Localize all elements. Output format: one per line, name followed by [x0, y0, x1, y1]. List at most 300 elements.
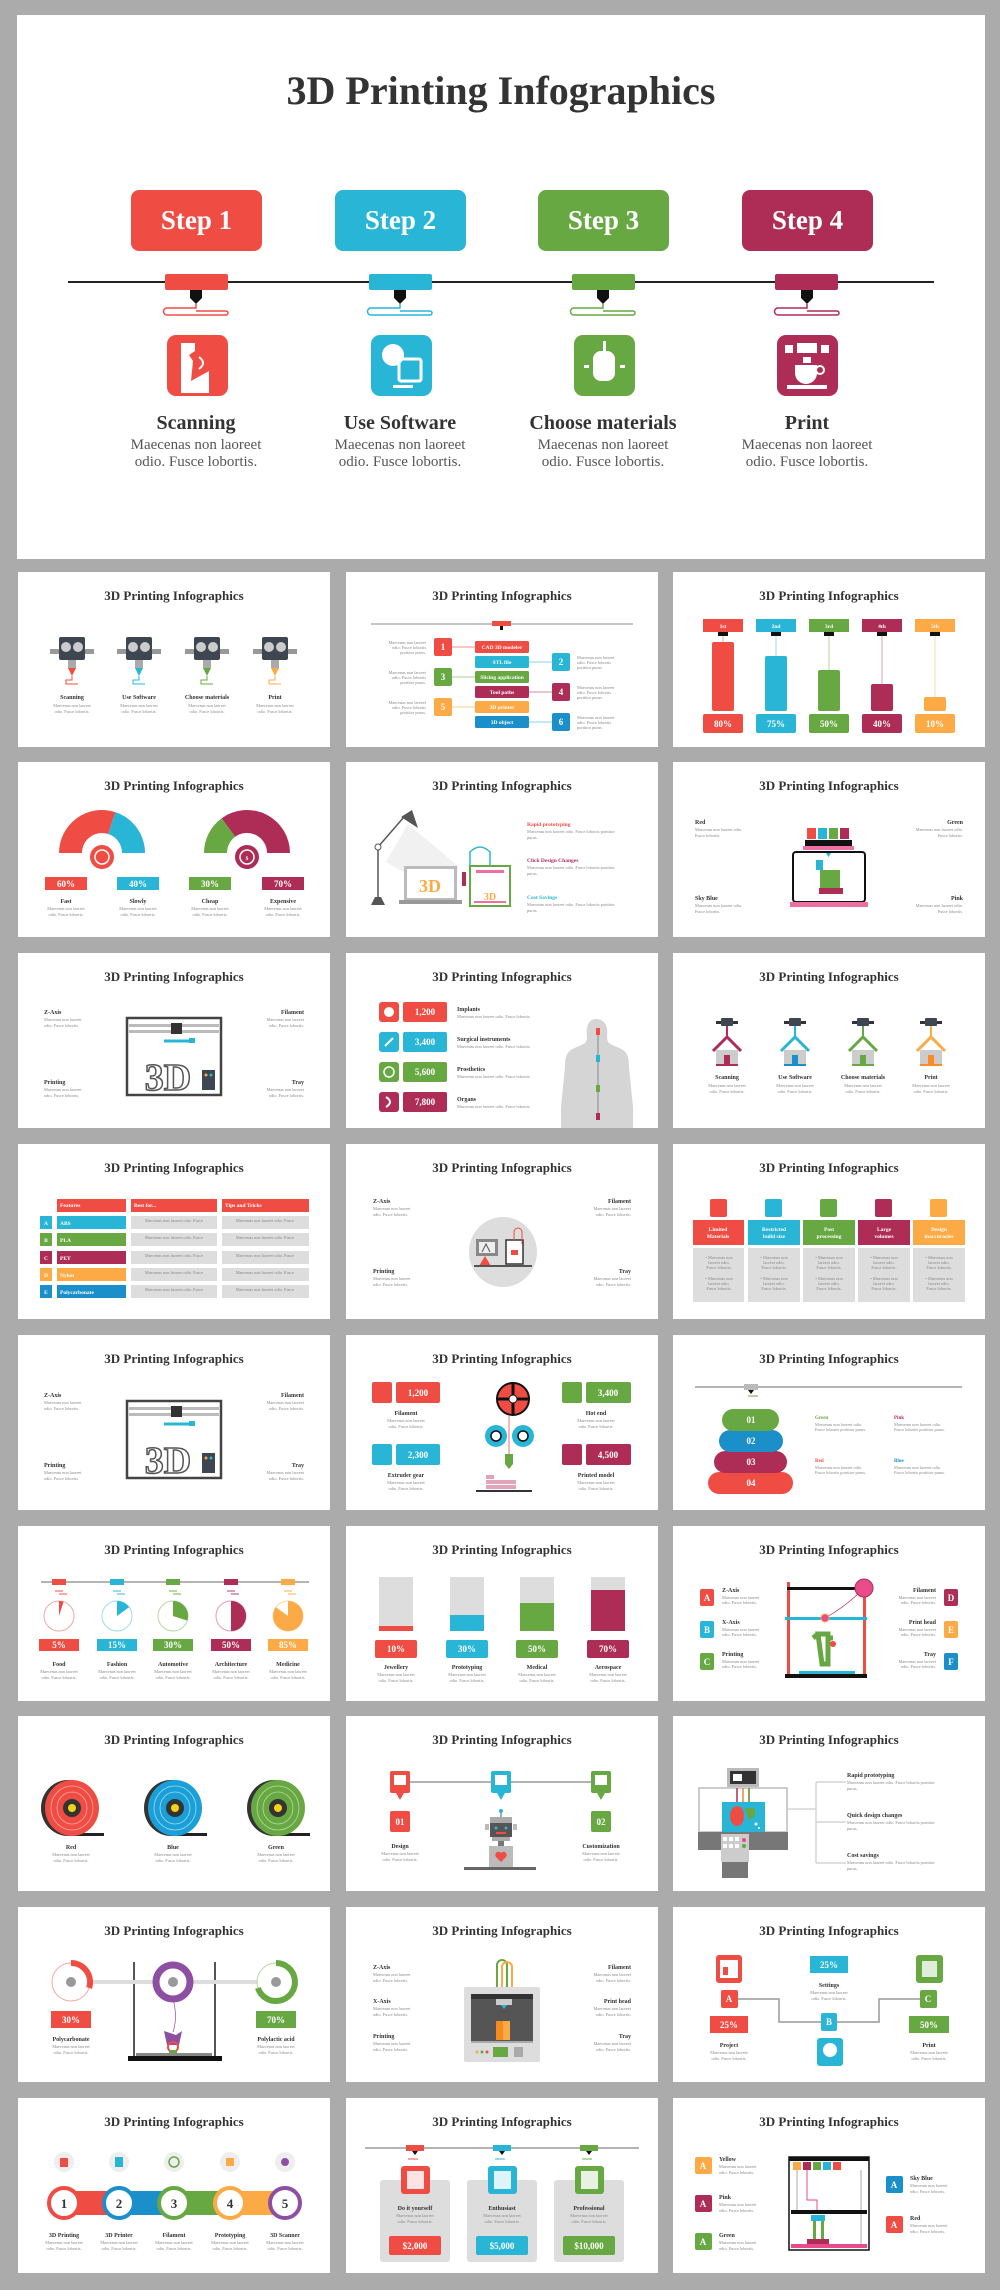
thumb 25: numbered chain: 3D Printer [105, 2233, 133, 2239]
thumb 15: stacked layers: Fusce lobortis porttitor purus. [894, 1427, 945, 1432]
thumb 24: workflow ABC: Project [720, 2043, 738, 2049]
thumb 12: limitations: 3D Printing Infographics [759, 1160, 899, 1175]
thumb 16: pie industries: Medicine [276, 1662, 300, 1668]
thumb 15: stacked layers: 04 [746, 1478, 756, 1488]
thumb 22: donut materials: 30% [62, 2015, 80, 2025]
thumb 10: materials table: B [44, 1238, 48, 1244]
thumb 13: printer axes (repeat): Printing [44, 1463, 65, 1469]
thumb 14: extruder parts: 3D Printing Infographics [432, 1351, 572, 1366]
thumb 13: printer axes (repeat) [18, 1335, 330, 1510]
thumb 9: houses: 3D Printing Infographics [759, 969, 899, 984]
thumb 13: printer axes (repeat): Z-Axis [44, 1393, 62, 1399]
thumb 24: workflow ABC: C [925, 1994, 931, 2004]
thumb 12: limitations: Limited [709, 1227, 727, 1233]
thumb 13: printer axes (repeat): Maecenas non laoreet [267, 1470, 305, 1475]
thumb 21: bioprinter: Maecenas non laoreet odio. Fusce lobortis porttitor [847, 1860, 935, 1865]
thumb 6: color printer: 3D Printing Infographics [759, 778, 899, 793]
thumb 4: gauges: odio. Fusce lobortis. [48, 912, 84, 917]
thumb 20: robot design: Maecenas non laoreet [381, 1851, 420, 1856]
thumb 4: gauges: Maecenas non laoreet [264, 906, 303, 911]
thumb 23: box printer: Printing [373, 2034, 394, 2040]
thumb 11: printer in circle: Filament [608, 1199, 631, 1205]
thumb 18: printer frame with letters: C [704, 1657, 710, 1667]
thumb 10: materials table: Maecenas non laoreet odio. Fusce [236, 1218, 294, 1223]
thumb 9: houses [673, 953, 985, 1128]
thumb 16: pie industries: Food [52, 1662, 66, 1668]
thumb 17: fill bars: 10% [387, 1644, 405, 1654]
thumb 18: printer frame with letters: odio. Fusce lobortis. [901, 1632, 936, 1637]
thumb 21: bioprinter [673, 1716, 985, 1891]
thumb 24: workflow ABC: 3D Printing Infographics [759, 1923, 899, 1938]
thumb 9: houses: Maecenas non laoreet [912, 1083, 951, 1088]
thumb 16: pie industries: odio. Fusce lobortis. [41, 1675, 77, 1680]
thumb 12: limitations: Fusce lobortis. [871, 1265, 897, 1270]
thumb 27: colour printer frame: Maecenas non laoreet [910, 2183, 948, 2188]
thumb 25: numbered chain: Filament [162, 2233, 186, 2239]
thumb 11: printer in circle: Maecenas non laoreet [373, 1206, 411, 1211]
step 3 label [538, 190, 669, 251]
thumb 16: pie industries: odio. Fusce lobortis. [270, 1675, 306, 1680]
thumb 26: pricing: $10,000 [574, 2241, 604, 2251]
thumb 16: pie industries: Architecture [215, 1662, 248, 1668]
thumb 4: gauges: 40% [129, 879, 147, 889]
thumb 13: printer axes (repeat): Tray [292, 1463, 304, 1469]
thumb 11: printer in circle [346, 1144, 658, 1319]
step 2 text: Maecenas non laoreet [335, 437, 465, 453]
thumb 7: printer axes: Z-Axis [44, 1010, 62, 1016]
thumb 3: ranking bars: 4th [878, 624, 886, 630]
thumb 9: houses: Maecenas non laoreet [844, 1083, 883, 1088]
thumb 5: lamp, laptop and printer: Click Design Changes [527, 858, 578, 864]
thumb 23: box printer: Tray [619, 2034, 631, 2040]
thumb 2: process flow: porttitor purus. [400, 680, 426, 685]
thumb 22: donut materials: Maecenas non laoreet [52, 2044, 91, 2049]
thumb 8: medical numbers: 5,600 [415, 1067, 436, 1077]
thumb 5: lamp, laptop and printer: purus. [527, 908, 538, 913]
thumb 5: lamp, laptop and printer: Maecenas non laoreet odio. Fusce lobortis porttitor [527, 829, 615, 834]
thumb 3: ranking bars: 5th [931, 624, 939, 630]
thumb 22: donut materials: Polylactic acid [257, 2037, 295, 2043]
thumb 27: colour printer frame: Green [719, 2233, 736, 2239]
thumb 26: pricing: odio. Fusce lobortis. [571, 2219, 607, 2224]
thumb 25: numbered chain: Maecenas non laoreet [45, 2240, 84, 2245]
thumb 1: print heads: odio. Fusce lobortis. [54, 709, 90, 714]
thumb 18: printer frame with letters: odio. Fusce lobortis. [722, 1600, 757, 1605]
thumb 10: materials table [18, 1144, 330, 1319]
thumb 12: limitations: • Maecenas non [705, 1276, 733, 1281]
thumb 25: numbered chain: odio. Fusce lobortis. [101, 2246, 137, 2251]
thumb 8: medical numbers: Surgical instruments [457, 1037, 511, 1043]
thumb 4: gauges: Maecenas non laoreet [119, 906, 158, 911]
thumb 2: process flow: Maecenas non laoreet [389, 640, 427, 645]
thumb 19: filament spools: Maecenas non laoreet [154, 1852, 193, 1857]
thumb 9: houses: odio. Fusce lobortis. [709, 1089, 745, 1094]
thumb 16: pie industries: 15% [108, 1640, 126, 1650]
thumb 24: workflow ABC: 25% [820, 1960, 838, 1970]
thumb 13: printer axes (repeat): odio. Fusce lobortis. [44, 1476, 79, 1481]
thumb 22: donut materials: Maecenas non laoreet [257, 2044, 296, 2049]
thumb 14: extruder parts: Maecenas non laoreet [387, 1418, 426, 1423]
thumb 18: printer frame with letters: Print head [909, 1620, 937, 1626]
thumb 10: materials table: Nylon [60, 1273, 74, 1279]
thumb 8: medical numbers: Maecenas non laoreet odio. Fusce lobortis. [457, 1074, 531, 1079]
thumb 21: bioprinter: purus. [847, 1866, 858, 1871]
thumb 6: color printer: Maecenas non laoreet odio. [695, 827, 742, 832]
thumb 25: numbered chain: odio. Fusce lobortis. [46, 2246, 82, 2251]
thumb 12: limitations: laoreet odio. [763, 1281, 785, 1286]
thumb 13: printer axes (repeat): odio. Fusce lobortis. [44, 1406, 79, 1411]
thumb 20: robot design: Maecenas non laoreet [582, 1851, 621, 1856]
thumb 20: robot design [346, 1716, 658, 1891]
thumb 25: numbered chain: 3D Printing Infographics [104, 2114, 244, 2129]
thumb 27: colour printer frame: Pink [719, 2195, 732, 2201]
thumb 12: limitations: • Maecenas non [815, 1255, 843, 1260]
thumb 2: process flow: 3D printer [490, 705, 515, 711]
thumb 12: limitations: Fusce lobortis. [761, 1265, 787, 1270]
thumb 2: process flow: odio. Fusce lobortis [577, 690, 611, 695]
thumb 1: print heads: Choose materials [185, 695, 230, 701]
thumb 27: colour printer frame: Maecenas non laoreet [719, 2164, 757, 2169]
thumb 12: limitations: • Maecenas non [815, 1276, 843, 1281]
thumb 12: limitations: Design [931, 1227, 947, 1233]
thumb 24: workflow ABC: Settings [819, 1983, 840, 1989]
printer rail with print heads [68, 274, 934, 316]
thumb 7: printer axes: Maecenas non laoreet [267, 1087, 305, 1092]
thumb 4: gauges: 3D Printing Infographics [104, 778, 244, 793]
thumb 24: workflow ABC: Maecenas non laoreet [710, 2050, 749, 2055]
thumb 23: box printer: X-Axis [373, 1999, 391, 2005]
thumb 10: materials table: Best for... [134, 1203, 157, 1209]
thumb 18: printer frame with letters: odio. Fusce lobortis. [901, 1600, 936, 1605]
thumb 19: filament spools: Green [268, 1845, 285, 1851]
thumb 9: houses: Choose materials [841, 1075, 886, 1081]
thumb 14: extruder parts [346, 1335, 658, 1510]
thumb 4: gauges: $ [246, 855, 249, 862]
thumb 25: numbered chain: Maecenas non laoreet [266, 2240, 305, 2245]
thumb 25: numbered chain: odio. Fusce lobortis. [212, 2246, 248, 2251]
step 1 heading: Scanning [157, 412, 235, 434]
thumb 2: process flow: Slicing application [480, 675, 524, 681]
thumb 27: colour printer frame: A [891, 2180, 898, 2190]
thumb 16: pie industries: Maecenas non laoreet [40, 1669, 79, 1674]
thumb 16: pie industries: Maecenas non laoreet [154, 1669, 193, 1674]
thumb 13: printer axes (repeat): odio. Fusce lobortis. [269, 1406, 304, 1411]
thumb 22: donut materials: 70% [267, 2015, 285, 2025]
thumb 7: printer axes: Maecenas non laoreet [267, 1017, 305, 1022]
main title: 3D Printing Infographics [287, 68, 715, 113]
thumb 11: printer in circle: Z-Axis [373, 1199, 391, 1205]
thumb 15: stacked layers: 3D Printing Infographics [759, 1351, 899, 1366]
thumb 5: lamp, laptop and printer: purus. [527, 835, 538, 840]
thumb 23: box printer: Maecenas non laoreet [373, 1972, 411, 1977]
thumb 24: workflow ABC: 50% [920, 2020, 938, 2030]
thumb 5: lamp, laptop and printer: Maecenas non laoreet odio. Fusce lobortis porttitor [527, 902, 615, 907]
thumb 23: box printer: odio. Fusce lobortis. [373, 2047, 408, 2052]
thumb 18: printer frame with letters: odio. Fusce lobortis. [722, 1664, 757, 1669]
thumb 14: extruder parts: Extruder gear [388, 1473, 425, 1479]
thumb 5: lamp, laptop and printer: 3D Printing Infographics [432, 778, 572, 793]
thumb 22: donut materials: Polycarbonate [52, 2037, 90, 2043]
thumb 1: print heads: odio. Fusce lobortis. [189, 709, 225, 714]
thumb 10: materials table: Maecenas non laoreet odio. Fusce [236, 1253, 294, 1258]
thumb 23: box printer: Maecenas non laoreet [594, 2006, 632, 2011]
thumb 21: bioprinter: Quick design changes [847, 1813, 903, 1819]
thumb 14: extruder parts: odio. Fusce lobortis. [578, 1424, 614, 1429]
thumb 12: limitations: processing [817, 1234, 842, 1240]
thumb 2: process flow: odio. Fusce lobortis [577, 720, 611, 725]
thumb 14: extruder parts: odio. Fusce lobortis. [388, 1424, 424, 1429]
thumb 4: gauges: odio. Fusce lobortis. [192, 912, 228, 917]
step 4 text [742, 437, 872, 470]
thumb 6: color printer: Maecenas non laoreet odio. [916, 827, 963, 832]
thumb 22: donut materials: odio. Fusce lobortis. [258, 2050, 294, 2055]
thumb 16: pie industries: odio. Fusce lobortis. [213, 1675, 249, 1680]
thumb 11: printer in circle: Tray [619, 1269, 631, 1275]
thumb 21: bioprinter: 3D Printing Infographics [759, 1732, 899, 1747]
thumb 17: fill bars: 70% [599, 1644, 617, 1654]
thumb 3: ranking bars: 1st [720, 624, 727, 630]
thumb 19: filament spools: 3D Printing Infographics [104, 1732, 244, 1747]
thumb 17: fill bars: Jewellery [384, 1665, 408, 1671]
thumb 6: color printer: Sky Blue [695, 896, 718, 902]
thumb 21: bioprinter: Rapid prototyping [847, 1773, 894, 1779]
thumb 1: print heads: Maecenas non laoreet [256, 703, 295, 708]
thumb 16: pie industries [18, 1526, 330, 1701]
thumb 8: medical numbers: Prosthetics [457, 1067, 486, 1073]
thumb 18: printer frame with letters: B [704, 1625, 710, 1635]
thumb 8: medical numbers: Maecenas non laoreet odio. Fusce lobortis. [457, 1014, 531, 1019]
thumb 13: printer axes (repeat): Maecenas non laoreet [44, 1400, 82, 1405]
thumb 25: numbered chain: Maecenas non laoreet [211, 2240, 250, 2245]
thumb 11: printer in circle: Maecenas non laoreet [594, 1276, 632, 1281]
thumb 10: materials table: A [44, 1221, 48, 1227]
thumb 14: extruder parts: Maecenas non laoreet [387, 1480, 426, 1485]
thumb 27: colour printer frame: 3D Printing Infographics [759, 2114, 899, 2129]
thumb 23: box printer: Print head [604, 1999, 632, 2005]
thumb 18: printer frame with letters: Maecenas non laoreet [722, 1595, 760, 1600]
thumb 2: process flow [346, 572, 658, 747]
thumb 18: printer frame with letters: 3D Printing Infographics [759, 1542, 899, 1557]
icon: print [777, 335, 838, 396]
thumb 2: process flow: 5 [441, 702, 446, 712]
thumb 12: limitations: Fusce lobortis. [816, 1265, 842, 1270]
thumb 19: filament spools: odio. Fusce lobortis. [53, 1858, 89, 1863]
thumb 20: robot design: Design [391, 1844, 409, 1850]
thumb 12: limitations: • Maecenas non [705, 1255, 733, 1260]
thumb 4: gauges: Maecenas non laoreet [47, 906, 86, 911]
thumb 12: limitations: Fusce lobortis. [926, 1265, 952, 1270]
thumb 26: pricing: Maecenas non laoreet [570, 2213, 609, 2218]
thumb 18: printer frame with letters: Tray [924, 1652, 936, 1658]
step 1 text [131, 437, 262, 470]
thumb 7: printer axes: 3D Printing Infographics [104, 969, 244, 984]
icon: materials [574, 335, 635, 396]
thumb 27: colour printer frame: odio. Fusce lobortis. [719, 2170, 754, 2175]
thumb 24: workflow ABC: B [826, 2017, 832, 2027]
step 4 heading: Print [785, 412, 829, 434]
thumb 25: numbered chain: 3D Scanner [270, 2233, 300, 2239]
thumb 19: filament spools [18, 1716, 330, 1891]
thumb 19: filament spools: Red [66, 1845, 77, 1851]
thumb 15: stacked layers: Green [815, 1416, 828, 1421]
thumb 10: materials table: Maecenas non laoreet odio. Fusce [145, 1218, 203, 1223]
thumb 8: medical numbers: 3D Printing Infographics [432, 969, 572, 984]
thumb 16: pie industries: Automotive [158, 1662, 188, 1668]
thumb 15: stacked layers: Fusce lobortis porttitor purus. [894, 1470, 945, 1475]
thumb 6: color printer: Pink [951, 896, 964, 902]
step 2 text [335, 437, 466, 470]
thumb 27: colour printer frame: Yellow [719, 2157, 737, 2163]
thumb 24: workflow ABC: 25% [720, 2020, 738, 2030]
thumb 25: numbered chain [18, 2098, 330, 2273]
thumb 17: fill bars: Medical [527, 1665, 548, 1671]
thumb 2: process flow: 3 [441, 672, 446, 682]
icon: scanning [167, 335, 228, 396]
thumb 12: limitations: Fusce lobortis. [706, 1286, 732, 1291]
thumb 26: pricing: Maecenas non laoreet [483, 2213, 522, 2218]
thumb 2: process flow: odio. Fusce lobortis [392, 645, 426, 650]
thumb 21: bioprinter: purus. [847, 1826, 858, 1831]
thumb 9: houses: Use Software [778, 1075, 812, 1081]
thumb 2: process flow: Maecenas non laoreet [389, 700, 427, 705]
thumb 12: limitations: Materials [707, 1234, 729, 1240]
step 2 heading: Use Software [344, 412, 456, 434]
thumb 17: fill bars [346, 1526, 658, 1701]
thumb 23: box printer [346, 1907, 658, 2082]
thumb 16: pie industries: odio. Fusce lobortis. [155, 1675, 191, 1680]
thumb 16: pie industries: 5% [52, 1640, 66, 1650]
thumb 7: printer axes: Maecenas non laoreet [44, 1017, 82, 1022]
thumb 11: printer in circle: odio. Fusce lobortis. [373, 1212, 408, 1217]
thumb 1: print heads: Use Software [122, 695, 156, 701]
step 3 text: odio. Fusce lobortis. [542, 454, 664, 470]
thumb 10: materials table: Maecenas non laoreet odio. Fusce [236, 1287, 294, 1292]
thumb 25: numbered chain: 3 [171, 2196, 178, 2211]
thumb 13: printer axes (repeat): Filament [281, 1393, 304, 1399]
thumb 5: lamp, laptop and printer: Cost Savings [527, 895, 557, 901]
step 3 text [538, 437, 668, 470]
thumb 7: printer axes: odio. Fusce lobortis. [269, 1023, 304, 1028]
thumb 10: materials table: Maecenas non laoreet odio. Fusce [145, 1235, 203, 1240]
thumb 14: extruder parts: Maecenas non laoreet [577, 1480, 616, 1485]
thumb 15: stacked layers [673, 1335, 985, 1510]
thumb 14: extruder parts: Printed model [578, 1473, 615, 1479]
thumb 23: box printer: 3D Printing Infographics [432, 1923, 572, 1938]
step 2 label [335, 190, 466, 251]
thumb 16: pie industries: Maecenas non laoreet [269, 1669, 308, 1674]
thumb 27: colour printer frame: Maecenas non laoreet [719, 2202, 757, 2207]
thumb 24: workflow ABC: A [726, 1994, 733, 2004]
thumb 2: process flow: CAD 3D modeler [482, 645, 523, 651]
thumb 2: process flow: 6 [559, 717, 564, 727]
thumb 1: print heads: odio. Fusce lobortis. [121, 709, 157, 714]
thumb 26: pricing: $2,000 [403, 2241, 428, 2251]
thumb 15: stacked layers: Fusce lobortis porttitor purus. [815, 1470, 866, 1475]
thumb 10: materials table: Maecenas non laoreet odio. Fusce [145, 1270, 203, 1275]
thumb 24: workflow ABC: Maecenas non laoreet [810, 1990, 849, 1995]
thumb 27: colour printer frame: A [700, 2199, 707, 2209]
thumb 17: fill bars: 3D Printing Infographics [432, 1542, 572, 1557]
thumb 14: extruder parts: odio. Fusce lobortis. [578, 1486, 614, 1491]
thumb 7: printer axes [18, 953, 330, 1128]
thumb 14: extruder parts: Hot end [586, 1411, 607, 1417]
thumb 8: medical numbers: Implants [457, 1007, 481, 1013]
thumb 16: pie industries: 85% [279, 1640, 297, 1650]
thumb 14: extruder parts: Filament [394, 1411, 418, 1417]
thumb 2: process flow: porttitor purus. [577, 695, 603, 700]
thumb 9: houses: odio. Fusce lobortis. [845, 1089, 881, 1094]
thumb 27: colour printer frame: A [700, 2161, 707, 2171]
thumb 18: printer frame with letters: odio. Fusce lobortis. [901, 1664, 936, 1669]
thumb 15: stacked layers: 03 [746, 1457, 756, 1467]
thumb 25: numbered chain: odio. Fusce lobortis. [267, 2246, 303, 2251]
thumb 26: pricing: $5,000 [490, 2241, 515, 2251]
thumb 18: printer frame with letters: Z-Axis [722, 1588, 740, 1594]
thumb 16: pie industries: odio. Fusce lobortis. [99, 1675, 135, 1680]
step 1 text: Maecenas non laoreet [131, 437, 261, 453]
thumb 18: printer frame with letters: odio. Fusce lobortis. [722, 1632, 757, 1637]
thumb 2: process flow: 4 [559, 687, 564, 697]
thumb 4: gauges: odio. Fusce lobortis. [265, 912, 301, 917]
thumb 7: printer axes: odio. Fusce lobortis. [44, 1093, 79, 1098]
thumb 10: materials table: E [44, 1290, 48, 1296]
thumb 13: printer axes (repeat): 3D [145, 1440, 191, 1482]
thumb 10: materials table: Tips and Tricks [225, 1203, 262, 1209]
thumb 8: medical numbers [346, 953, 658, 1128]
thumb 12: limitations: laoreet odio. [818, 1260, 840, 1265]
thumb 15: stacked layers: Maecenas non laoreet odio. [894, 1465, 941, 1470]
thumb 17: fill bars: Maecenas non laoreet [377, 1672, 416, 1677]
thumb 18: printer frame with letters: X-Axis [722, 1620, 740, 1626]
thumb 1: print heads: Maecenas non laoreet [188, 703, 227, 708]
thumb 10: materials table: PET [60, 1256, 71, 1262]
thumb 23: box printer: Maecenas non laoreet [594, 1972, 632, 1977]
thumb 5: lamp, laptop and printer: 3D [484, 892, 496, 903]
thumb 27: colour printer frame: Red [910, 2216, 921, 2222]
thumb 17: fill bars: Aerospace [595, 1665, 622, 1671]
thumb 21: bioprinter: Cost savings [847, 1853, 880, 1859]
thumb 2: process flow: Maecenas non laoreet [577, 685, 615, 690]
thumb 13: printer axes (repeat): 3D Printing Infographics [104, 1351, 244, 1366]
thumb 12: limitations: Fusce lobortis. [816, 1286, 842, 1291]
thumb 27: colour printer frame: Sky Blue [910, 2176, 933, 2182]
thumb 14: extruder parts: 4,500 [598, 1450, 619, 1460]
thumb 23: box printer: odio. Fusce lobortis. [373, 2012, 408, 2017]
thumb 2: process flow: Tool paths [490, 690, 514, 696]
step 1 label [131, 190, 262, 251]
thumb 1: print heads: Scanning [60, 695, 84, 701]
thumb 8: medical numbers: 3,400 [415, 1037, 436, 1047]
thumb 24: workflow ABC [673, 1907, 985, 2082]
thumb 2: process flow: porttitor purus. [400, 650, 426, 655]
thumb 4: gauges: 60% [57, 879, 75, 889]
thumb 4: gauges: Slowly [129, 899, 147, 905]
thumb 25: numbered chain: Prototyping [215, 2233, 245, 2239]
thumb 18: printer frame with letters: Maecenas non laoreet [722, 1659, 760, 1664]
thumb 13: printer axes (repeat): Maecenas non laoreet [267, 1400, 305, 1405]
thumb 17: fill bars: 50% [528, 1644, 546, 1654]
thumb 12: limitations: Restricted [762, 1227, 786, 1233]
thumb 1: print heads: 3D Printing Infographics [104, 588, 244, 603]
thumb 9: houses: Print [924, 1075, 938, 1081]
thumb 25: numbered chain: 1 [61, 2196, 67, 2211]
thumb 12: limitations [673, 1144, 985, 1319]
thumb 8: medical numbers: Organs [457, 1097, 477, 1103]
thumb 1: print heads: Print [268, 695, 282, 701]
thumb 23: box printer: Maecenas non laoreet [373, 2041, 411, 2046]
step 3 text: Maecenas non laoreet [538, 437, 668, 453]
thumb 2: process flow: 3D object [491, 720, 513, 726]
